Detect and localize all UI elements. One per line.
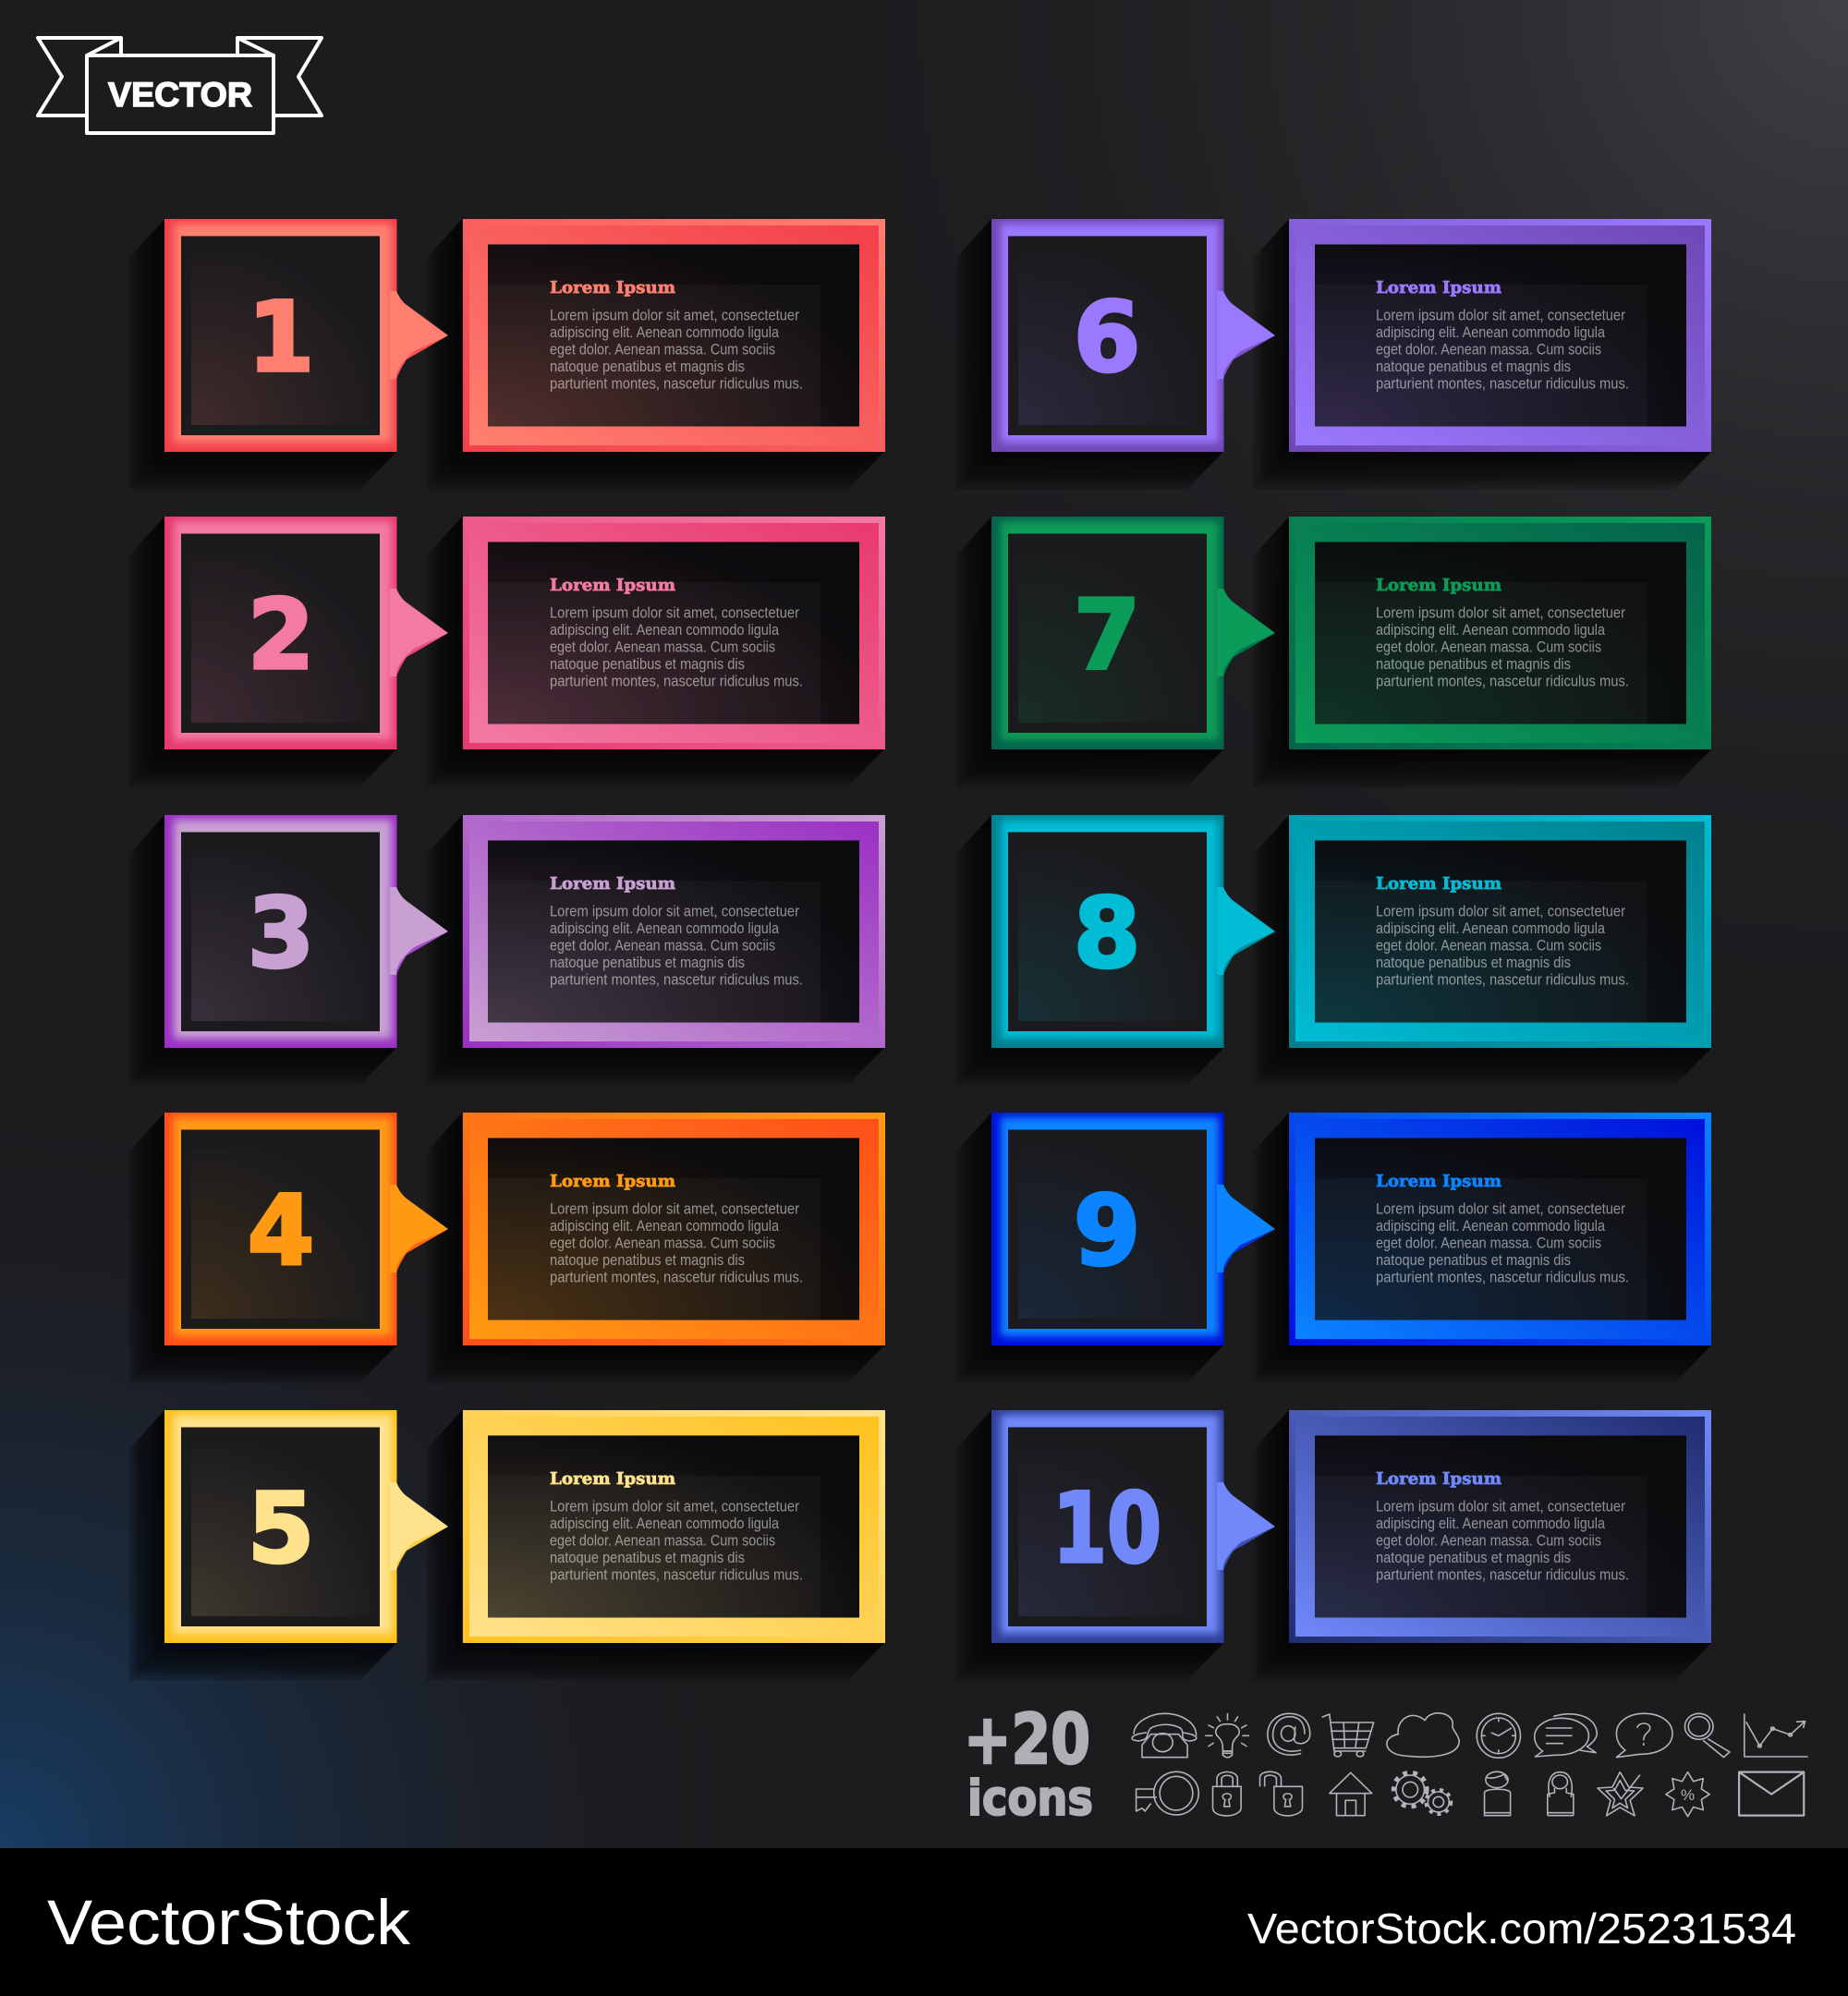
- text panel 4: adipiscing elit. Aenean commodo ligula: [550, 1217, 779, 1235]
- icon: chat bubbles: [1535, 1714, 1597, 1757]
- text panel 7: [1289, 517, 1711, 749]
- text panel 3: natoque penatibus et magnis dis: [550, 954, 745, 971]
- footer logo text: VectorStock: [47, 1887, 411, 1958]
- text panel 10: [1289, 1410, 1711, 1643]
- text panel 6: [1289, 219, 1711, 452]
- label: percent sign: %: [1681, 1786, 1695, 1804]
- text panel 6: Lorem Ipsum: [1376, 278, 1502, 298]
- number box 7: [991, 517, 1275, 749]
- item 5: [128, 1410, 885, 1681]
- text panel 4: [463, 1113, 885, 1345]
- number box 3: [164, 815, 448, 1048]
- text panel 2: Lorem ipsum dolor sit amet, consectetuer: [550, 604, 799, 621]
- text panel 3: Lorem Ipsum: [550, 874, 675, 894]
- text panel 10: natoque penatibus et magnis dis: [1376, 1549, 1571, 1566]
- item 7: [955, 517, 1711, 787]
- shadow: item 8: [955, 815, 1711, 1086]
- number box 5: [164, 1410, 448, 1643]
- text panel 2: Lorem Ipsum: [550, 576, 675, 595]
- text panel 5: [463, 1410, 885, 1643]
- text panel 7: eget dolor. Aenean massa. Cum sociis: [1376, 638, 1601, 656]
- text panel 1: adipiscing elit. Aenean commodo ligula: [550, 323, 779, 341]
- text panel 7: adipiscing elit. Aenean commodo ligula: [1376, 621, 1605, 639]
- number box 2: 2: [248, 578, 314, 691]
- icon: star: [1598, 1772, 1643, 1816]
- text panel 4: Lorem ipsum dolor sit amet, consectetuer: [550, 1199, 799, 1218]
- text panel 6: parturient montes, nascetur ridiculus mus.: [1376, 375, 1629, 392]
- text panel 1: parturient montes, nascetur ridiculus mus.: [550, 375, 803, 392]
- text panel 5: Lorem ipsum dolor sit amet, consectetuer: [550, 1497, 799, 1515]
- icon: shopping cart: [1322, 1714, 1374, 1757]
- number box 4: [164, 1113, 448, 1345]
- text panel 4: eget dolor. Aenean massa. Cum sociis: [550, 1235, 775, 1251]
- heading: +20 icons: icons: [967, 1771, 1093, 1827]
- text panel 10: Lorem ipsum dolor sit amet, consectetuer: [1376, 1497, 1625, 1515]
- icon: magnifier: [1684, 1713, 1730, 1758]
- text panel 4: parturient montes, nascetur ridiculus mus.: [550, 1268, 803, 1286]
- item 9: [955, 1113, 1711, 1383]
- text panel 5: Lorem Ipsum: [550, 1469, 675, 1489]
- text panel 10: Lorem Ipsum: [1376, 1469, 1502, 1489]
- text panel 8: Lorem ipsum dolor sit amet, consectetuer: [1376, 902, 1625, 920]
- shadow: item 1: [128, 219, 884, 490]
- text panel 3: eget dolor. Aenean massa. Cum sociis: [550, 937, 775, 954]
- text panel 2: natoque penatibus et magnis dis: [550, 655, 745, 673]
- icon: line chart: [1745, 1713, 1808, 1757]
- icon: man: [1485, 1771, 1511, 1816]
- text panel 2: parturient montes, nascetur ridiculus mus.: [550, 673, 803, 689]
- icon: at sign: [1268, 1713, 1310, 1755]
- text panel 8: natoque penatibus et magnis dis: [1376, 954, 1571, 971]
- text panel 3: Lorem ipsum dolor sit amet, consectetuer: [550, 902, 799, 920]
- icon: question bubble: [1616, 1713, 1672, 1758]
- number box 10: [991, 1410, 1275, 1643]
- item 4: [128, 1113, 885, 1383]
- shadow: item 10: [955, 1410, 1711, 1681]
- footer bar: [0, 1848, 1848, 1996]
- text panel 1: [463, 219, 885, 452]
- icon: cloud: [1387, 1713, 1459, 1757]
- heading: +20 icons: +20: [964, 1698, 1090, 1780]
- icon: woman: [1548, 1772, 1574, 1816]
- number box 4: 4: [248, 1174, 314, 1287]
- item 8: [955, 815, 1711, 1086]
- shadow: item 9: [955, 1113, 1711, 1383]
- number box 1: [164, 219, 448, 452]
- text panel 8: Lorem Ipsum: [1376, 874, 1502, 894]
- text panel 6: eget dolor. Aenean massa. Cum sociis: [1376, 340, 1601, 359]
- number box 2: [164, 517, 448, 749]
- text panel 5: adipiscing elit. Aenean commodo ligula: [550, 1515, 779, 1532]
- text panel 7: Lorem Ipsum: [1376, 576, 1502, 595]
- shadow: item 4: [128, 1113, 884, 1383]
- icon: house: [1330, 1772, 1372, 1816]
- text panel 9: adipiscing elit. Aenean commodo ligula: [1376, 1217, 1605, 1235]
- text panel 6: natoque penatibus et magnis dis: [1376, 358, 1571, 375]
- text panel 2: eget dolor. Aenean massa. Cum sociis: [550, 638, 775, 656]
- icon: discount burst: [1666, 1772, 1709, 1817]
- heading: +20 icons: [964, 1698, 1093, 1827]
- item 2: [128, 517, 885, 787]
- text panel 9: parturient montes, nascetur ridiculus mus.: [1376, 1268, 1629, 1286]
- icon: clock: [1477, 1713, 1520, 1758]
- number box 8: 8: [1074, 877, 1140, 990]
- text panel 4: natoque penatibus et magnis dis: [550, 1251, 745, 1269]
- number box 8: [991, 815, 1275, 1048]
- text panel 2: adipiscing elit. Aenean commodo ligula: [550, 621, 779, 639]
- text panel 5: natoque penatibus et magnis dis: [550, 1549, 745, 1566]
- text panel 9: Lorem ipsum dolor sit amet, consectetuer: [1376, 1199, 1625, 1218]
- text panel 9: eget dolor. Aenean massa. Cum sociis: [1376, 1235, 1601, 1251]
- number box 6: [991, 219, 1275, 452]
- text panel 3: parturient montes, nascetur ridiculus mus.: [550, 970, 803, 989]
- text panel 1: eget dolor. Aenean massa. Cum sociis: [550, 340, 775, 359]
- text panel 7: natoque penatibus et magnis dis: [1376, 655, 1571, 673]
- text panel 8: eget dolor. Aenean massa. Cum sociis: [1376, 937, 1601, 954]
- text panel 9: natoque penatibus et magnis dis: [1376, 1251, 1571, 1269]
- icon: envelope: [1739, 1772, 1804, 1816]
- text panel 10: adipiscing elit. Aenean commodo ligula: [1376, 1515, 1605, 1532]
- icon: speaker: [1137, 1771, 1198, 1815]
- text panel 6: Lorem ipsum dolor sit amet, consectetuer: [1376, 307, 1625, 323]
- text panel 6: adipiscing elit. Aenean commodo ligula: [1376, 323, 1605, 341]
- icon: telephone: [1132, 1713, 1197, 1758]
- text panel 2: [463, 517, 885, 749]
- text panel 4: Lorem Ipsum: [550, 1172, 675, 1191]
- icon set: [1132, 1713, 1808, 1817]
- text panel 10: parturient montes, nascetur ridiculus mus.: [1376, 1565, 1629, 1584]
- item 6: [955, 219, 1711, 490]
- icon: closed lock: [1213, 1771, 1241, 1816]
- number box 9: [991, 1113, 1275, 1345]
- text panel 1: natoque penatibus et magnis dis: [550, 358, 745, 375]
- icon: light bulb: [1205, 1713, 1249, 1758]
- shadow: item 6: [955, 219, 1711, 490]
- shadow: item 7: [955, 517, 1711, 787]
- text panel 3: adipiscing elit. Aenean commodo ligula: [550, 919, 779, 937]
- item 1: [128, 219, 885, 490]
- shadow: item 3: [128, 815, 884, 1086]
- number box 6: 6: [1074, 281, 1140, 394]
- number box 9: 9: [1074, 1174, 1140, 1287]
- shadow: item 5: [128, 1410, 884, 1681]
- icon: open lock: [1260, 1771, 1302, 1816]
- text panel 5: parturient montes, nascetur ridiculus mus.: [550, 1565, 803, 1584]
- text panel 7: Lorem ipsum dolor sit amet, consectetuer: [1376, 604, 1625, 621]
- text panel 10: eget dolor. Aenean massa. Cum sociis: [1376, 1532, 1601, 1549]
- number box 3: 3: [248, 877, 314, 990]
- text panel 8: adipiscing elit. Aenean commodo ligula: [1376, 919, 1605, 937]
- footer url text: VectorStock.com/25231534: [1247, 1905, 1796, 1953]
- text panel 3: [463, 815, 885, 1048]
- text panel 9: Lorem Ipsum: [1376, 1172, 1502, 1191]
- number box 1: 1: [248, 281, 314, 394]
- item 10: [955, 1410, 1711, 1681]
- number box 5: 5: [248, 1472, 314, 1585]
- badge: vector ribbon: [38, 38, 322, 133]
- shadow: item 2: [128, 517, 884, 787]
- item 3: [128, 815, 885, 1086]
- text panel 5: eget dolor. Aenean massa. Cum sociis: [550, 1532, 775, 1549]
- text panel 7: parturient montes, nascetur ridiculus mus.: [1376, 673, 1629, 689]
- number box 10: 10: [1052, 1472, 1161, 1585]
- text panel 1: Lorem ipsum dolor sit amet, consectetuer: [550, 307, 799, 323]
- text panel 9: [1289, 1113, 1711, 1345]
- number box 7: 7: [1074, 578, 1140, 691]
- text panel 8: [1289, 815, 1711, 1048]
- icon: gears: [1393, 1772, 1451, 1814]
- text panel 8: parturient montes, nascetur ridiculus mus.: [1376, 970, 1629, 989]
- badge: vector ribbon: VECTOR: [108, 76, 252, 114]
- text panel 1: Lorem Ipsum: [550, 278, 675, 298]
